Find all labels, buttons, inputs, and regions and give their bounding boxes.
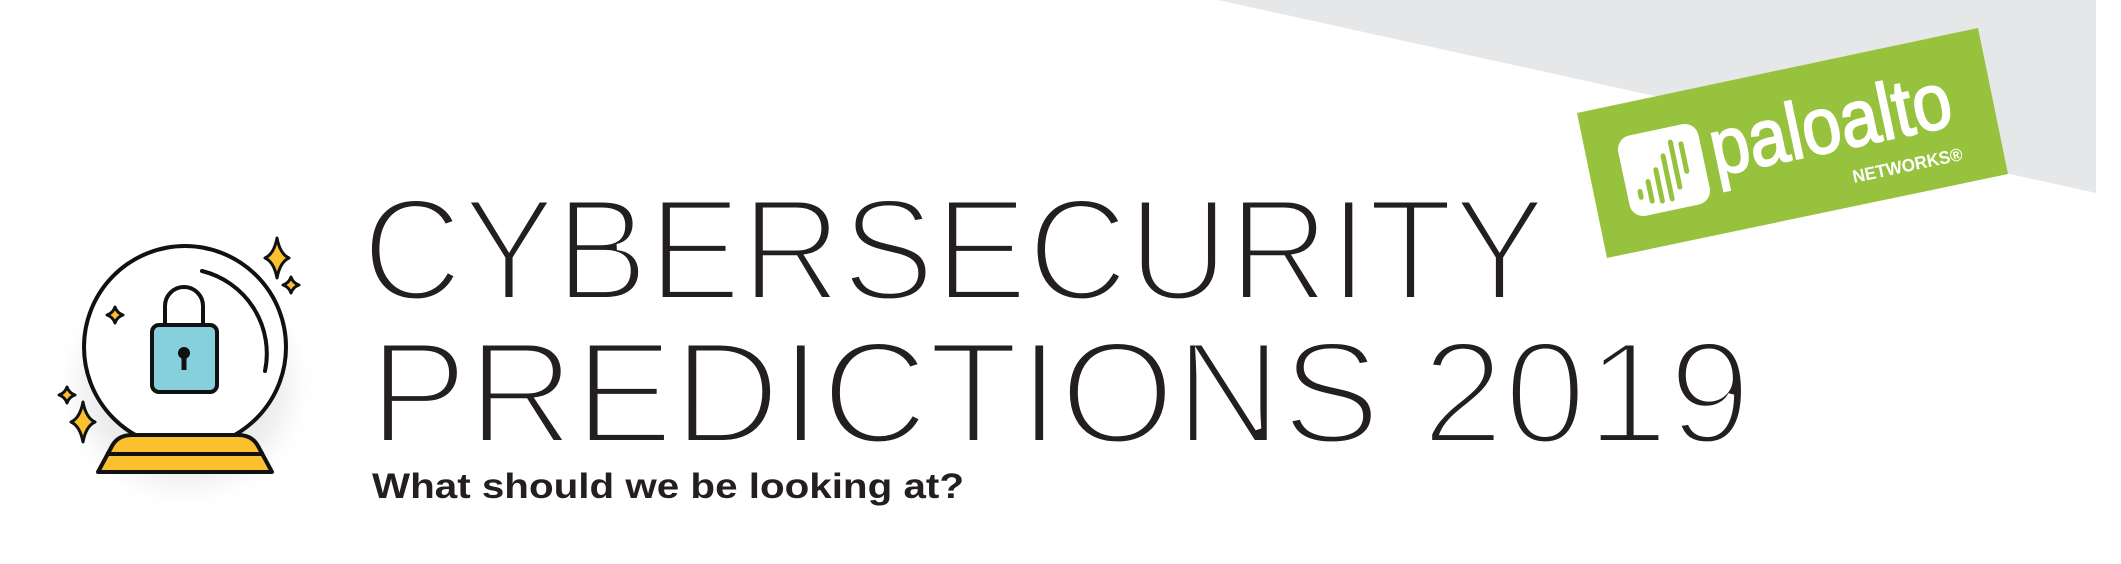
title: PREDICTIONS 2019 <box>369 311 1751 474</box>
background gray wedge <box>1218 0 2096 193</box>
title <box>362 168 1751 474</box>
logo text: paloalto <box>1701 55 1959 193</box>
subtitle: What should we be looking at? <box>372 467 964 506</box>
title: CYBERSECURITY <box>362 168 1546 331</box>
icon: crystal ball with lock <box>59 238 299 485</box>
base <box>98 435 272 472</box>
lock <box>165 287 203 326</box>
logo: palo alto networks <box>1577 28 2008 258</box>
logo: palo alto networks: NETWORKS® <box>1851 144 1964 187</box>
icon: logo mark <box>1615 121 1713 219</box>
sparkles <box>59 238 299 442</box>
